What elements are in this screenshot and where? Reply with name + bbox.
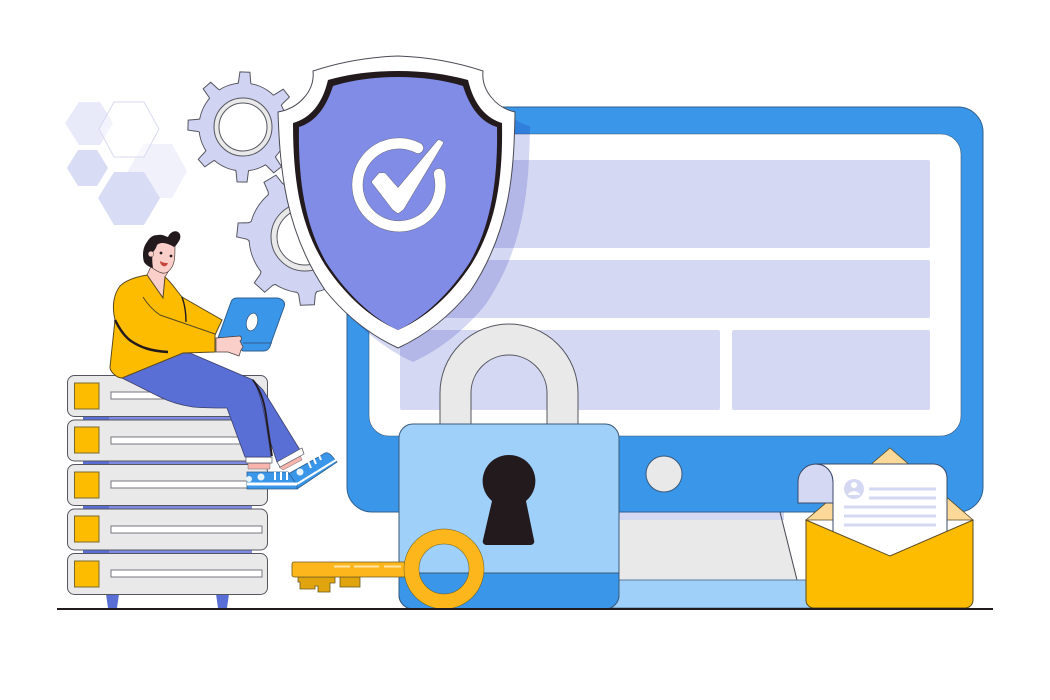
shackle (440, 324, 578, 424)
server unit 3 (68, 464, 268, 506)
monitor (347, 107, 983, 608)
shoe near (246, 472, 297, 489)
shield shadow (359, 120, 530, 362)
server connectors (83, 416, 252, 553)
envelope with letter (798, 448, 973, 608)
monitor screen (369, 134, 961, 436)
person with laptop (110, 231, 337, 489)
head (143, 231, 180, 273)
lower gear (236, 172, 364, 305)
keyhole (483, 455, 535, 545)
gears (188, 72, 364, 305)
envelope back flap (806, 448, 973, 520)
icon: check mark in ring (357, 142, 441, 226)
laptop (218, 298, 285, 351)
letter curl (798, 464, 833, 503)
shield (278, 56, 515, 348)
hand (216, 336, 243, 356)
server unit 5 (68, 554, 268, 594)
far trouser leg (253, 380, 300, 462)
upper gear (188, 72, 298, 182)
server legs (106, 594, 229, 608)
padlock (399, 324, 619, 609)
envelope front (806, 520, 973, 608)
lock body (399, 424, 619, 609)
socks and cuffs (246, 448, 304, 473)
shoe far (288, 453, 337, 489)
server unit 2 (68, 420, 268, 461)
key (292, 536, 476, 602)
letter (816, 464, 947, 562)
monitor frame (347, 107, 983, 512)
sweater (110, 275, 222, 378)
monitor stand (600, 512, 815, 608)
hexagon cluster (65, 102, 187, 225)
ground line (57, 608, 993, 610)
neck (147, 262, 172, 298)
near trouser leg and thigh (122, 353, 272, 457)
server unit 1 (68, 376, 268, 416)
monitor power button (646, 456, 682, 492)
server unit 4 (68, 509, 268, 550)
illustration: cyber security scene (57, 56, 993, 610)
server stack (68, 376, 268, 608)
